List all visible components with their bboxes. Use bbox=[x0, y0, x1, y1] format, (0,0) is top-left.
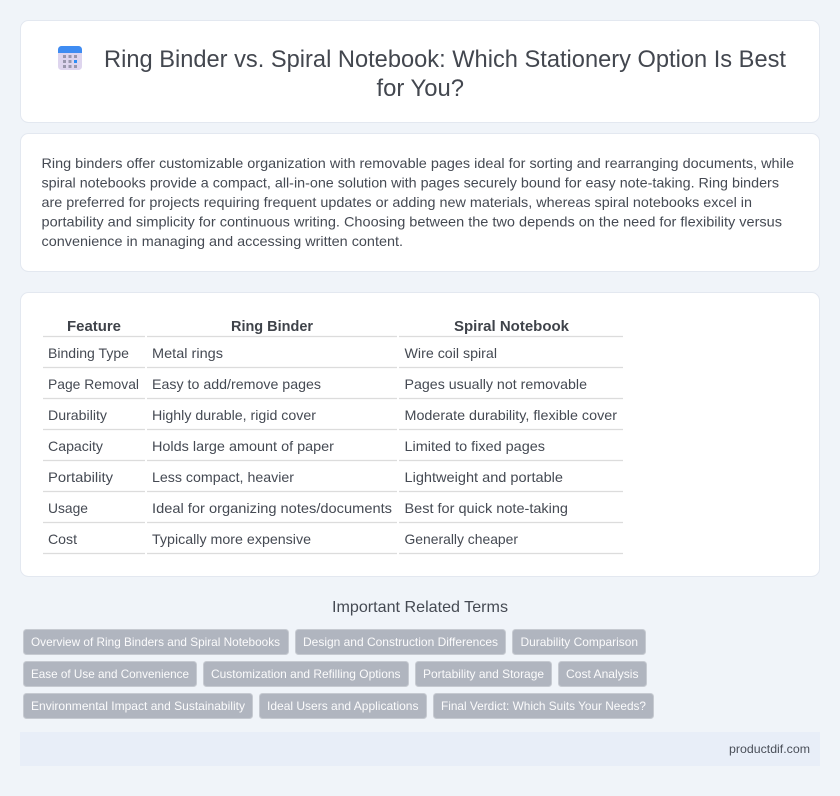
table header: Spiral Notebook bbox=[454, 319, 570, 335]
tag: Environmental Impact and Sustainability bbox=[31, 699, 245, 713]
table row: capacity: Limited to fixed pages bbox=[404, 438, 545, 454]
table row: page removal bbox=[43, 376, 623, 398]
text block: summary bbox=[42, 155, 794, 249]
table row: cost bbox=[43, 531, 623, 554]
table row: page removal: Pages usually not removable bbox=[404, 376, 587, 392]
tag bbox=[24, 630, 288, 654]
title: Ring Binder vs. Spiral Notebook: Which Stationery Option Is Best bbox=[104, 46, 786, 73]
table header bbox=[43, 319, 623, 336]
title bbox=[104, 46, 786, 102]
table header: Feature bbox=[67, 319, 121, 335]
table row: cost: Cost bbox=[48, 531, 77, 547]
table row: capacity: Holds large amount of paper bbox=[152, 438, 334, 454]
tag bbox=[204, 662, 408, 686]
table row: portability: Less compact, heavier bbox=[152, 469, 294, 485]
table row: binding type: Binding Type bbox=[48, 345, 129, 361]
table row: durability bbox=[43, 407, 623, 430]
table row: binding type: Metal rings bbox=[152, 345, 223, 361]
tag bbox=[512, 630, 646, 654]
tag bbox=[24, 694, 252, 718]
tag bbox=[296, 630, 506, 654]
table row: usage: Best for quick note-taking bbox=[404, 500, 568, 516]
table row: capacity bbox=[43, 438, 623, 460]
tag: Overview of Ring Binders and Spiral Notebooks bbox=[31, 635, 280, 649]
table row: durability: Moderate durability, flexible cover bbox=[404, 407, 617, 423]
tag bbox=[416, 662, 552, 686]
panel: comparison table bbox=[20, 292, 820, 576]
table row: cost: Typically more expensive bbox=[152, 531, 311, 547]
tag bbox=[434, 694, 654, 718]
tag: Ideal Users and Applications bbox=[267, 699, 418, 713]
tag: Design and Construction Differences bbox=[303, 635, 498, 649]
footer: productdif.com bbox=[729, 742, 810, 756]
table row: portability: Lightweight and portable bbox=[404, 469, 563, 485]
table row: durability: Highly durable, rigid cover bbox=[152, 407, 316, 423]
icon: binder calendar bbox=[58, 46, 82, 70]
tag: Cost Analysis bbox=[566, 667, 638, 681]
text block: summary: Ring binders offer customizable organization with removable pages ideal for sorting and rearranging documents, while bbox=[42, 155, 794, 171]
tag: Ease of Use and Convenience bbox=[31, 667, 189, 681]
tag bbox=[260, 694, 426, 718]
tag bbox=[24, 662, 196, 686]
table row: portability bbox=[43, 469, 623, 492]
table row: page removal: Easy to add/remove pages bbox=[152, 376, 321, 392]
table row: binding type bbox=[43, 345, 623, 368]
heading: important related terms: Important Related Terms bbox=[332, 599, 508, 616]
tag group: related terms bbox=[24, 630, 654, 718]
tag: Durability Comparison bbox=[520, 635, 638, 649]
table row: page removal: Page Removal bbox=[48, 376, 139, 392]
table row: usage: Ideal for organizing notes/documents bbox=[152, 500, 392, 516]
table row: capacity: Capacity bbox=[48, 438, 103, 454]
table row: usage bbox=[43, 500, 623, 522]
title: for You? bbox=[376, 75, 464, 102]
table row: binding type: Wire coil spiral bbox=[404, 345, 497, 361]
text block: summary: convenience in managing and accessing written content. bbox=[42, 233, 403, 249]
tag: Portability and Storage bbox=[423, 667, 544, 681]
table row: durability: Durability bbox=[48, 407, 107, 423]
table row: portability: Portability bbox=[48, 469, 113, 485]
tag bbox=[558, 662, 646, 686]
footer bbox=[20, 732, 820, 766]
tag: Customization and Refilling Options bbox=[211, 667, 400, 681]
text block: summary: spiral notebooks provide a compact, all-in-one solution with pages securely bound for easy note-taking. Ring binders bbox=[42, 174, 779, 190]
text block: summary: are preferred for projects requiring frequent updates or adding new materials, whereas spiral notebooks excel in bbox=[42, 194, 752, 210]
table row: usage: Usage bbox=[48, 500, 88, 516]
table row: cost: Generally cheaper bbox=[404, 531, 518, 547]
panel: summary paragraph bbox=[20, 134, 820, 272]
tag: Final Verdict: Which Suits Your Needs? bbox=[441, 699, 646, 713]
panel: header bbox=[20, 20, 820, 122]
text block: summary: portability and simplicity for continuous writing. Choosing between the two depends on the need for flexibility versus bbox=[42, 214, 782, 230]
table header: Ring Binder bbox=[231, 319, 313, 335]
